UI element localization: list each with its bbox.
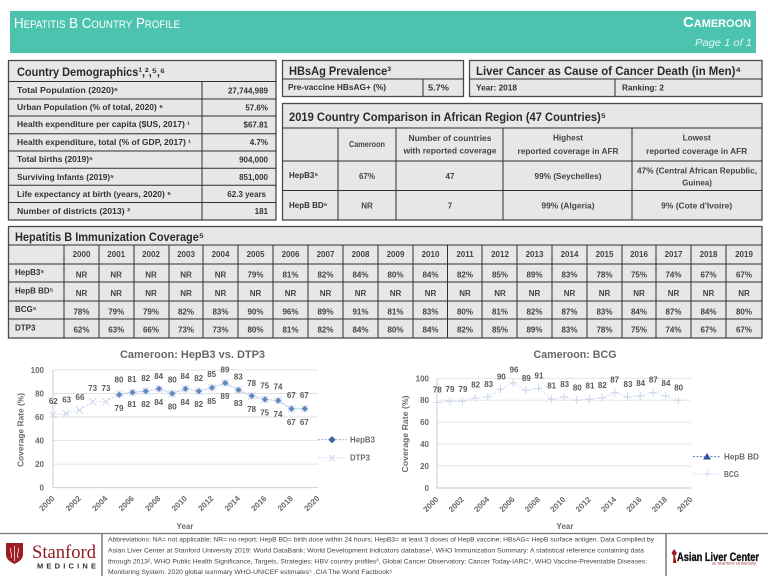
row: HepB3 coverage: 85%: [492, 270, 508, 280]
row: BCG coverage: 79%: [108, 308, 124, 316]
comparison row: HepB BD: 99% (Algeria): [542, 202, 595, 210]
x axis: [37, 494, 322, 513]
row: HepB3 coverage: 83%: [561, 270, 578, 280]
demographic rows: Health expenditure per capita ($US, 2017) ¹: [17, 120, 190, 129]
y axis title: Coverage Rate (%): [16, 393, 26, 467]
y axis: 100: [416, 374, 430, 383]
x axis title: Year: [557, 522, 573, 531]
comparison row: HepB3: Guinea): [682, 178, 712, 188]
BCG data labels: 78: [433, 386, 442, 394]
year header row: 2019: [735, 250, 753, 259]
row: HepB BD coverage: NR: [145, 289, 157, 298]
x axis: [421, 495, 695, 514]
row: DTP3 coverage: 82%: [317, 326, 334, 334]
row: HepB BD coverage: NR: [459, 289, 471, 298]
row: HepB BD coverage: [15, 286, 750, 298]
row: DTP3 coverage: DTP3: [15, 324, 36, 332]
row: HepB3 coverage: 75%: [631, 270, 647, 280]
comparison row: HepB3: 99% (Seychelles): [534, 172, 602, 181]
y axis: 80: [35, 390, 45, 398]
row: DTP3 coverage: 85%: [492, 326, 508, 334]
demographic rows: 62.3 years: [227, 190, 267, 199]
row: DTP3 coverage: 89%: [526, 326, 543, 334]
x axis: 2004: [472, 495, 492, 514]
row: DTP3 coverage: 63%: [108, 326, 124, 334]
y axis title: Coverage Rate (%): [401, 395, 410, 472]
row: HepB3 coverage: NR: [76, 270, 87, 280]
y axis: 60: [420, 418, 430, 427]
year header row: 2010: [422, 250, 440, 259]
x axis: 2020: [675, 495, 695, 514]
DTP3 data labels: 67: [300, 391, 309, 400]
legend: [318, 436, 376, 462]
BCG data labels: 89: [522, 374, 531, 383]
heading: HBsAg prevalence: HBsAg Prevalence³: [289, 64, 391, 78]
y axis: 60: [35, 413, 45, 422]
row: DTP3 coverage: 73%: [212, 326, 229, 334]
HepB3 data labels: 89: [221, 392, 230, 401]
y axis: 40: [420, 440, 430, 449]
panel: immunization coverage table: [8, 226, 762, 338]
country name: Cameroon: [683, 14, 751, 31]
row: HepB BD coverage: NR: [180, 289, 192, 298]
demographic rows: 27,744,989: [228, 86, 269, 96]
row: BCG coverage: 84%: [700, 308, 717, 316]
x axis: 2016: [249, 494, 269, 513]
x axis: 2010: [170, 494, 189, 513]
year header row: 2006: [282, 250, 300, 259]
BCG data labels: 87: [610, 376, 620, 384]
year header row: 2000: [73, 250, 91, 259]
HepB3 data labels: 81: [128, 400, 137, 409]
BCG data labels: 91: [535, 372, 544, 380]
HepB3 data labels: 80: [168, 402, 177, 412]
row: HepB BD coverage: NR: [110, 289, 122, 298]
row: BCG coverage: BCG⁵: [15, 305, 37, 314]
Medicine wordmark: MEDICINE: [37, 562, 96, 570]
DTP3 data labels: 84: [181, 372, 190, 381]
demographic rows: 904,000: [239, 156, 269, 164]
DTP3 data labels: 82: [194, 374, 204, 383]
Stanford University tagline: at Stanford University: [712, 560, 756, 566]
row: HepB3 coverage: 89%: [526, 270, 543, 280]
year header row: 2016: [630, 250, 648, 259]
comparison column headers: Lowest: [683, 134, 711, 142]
row: BCG coverage: [15, 305, 752, 316]
BCG data labels: 80: [674, 384, 684, 392]
row: HepB BD coverage: NR: [668, 289, 679, 298]
year header row: 2018: [700, 250, 718, 259]
year header row: 2004: [212, 250, 230, 259]
demographic rows: Number of districts (2013) ²: [17, 207, 130, 216]
line chart: BCG: [401, 349, 759, 531]
x axis: 2010: [548, 495, 568, 514]
BCG data labels: 82: [598, 381, 607, 390]
BCG data labels: 84: [636, 379, 646, 388]
row: BCG coverage: 78%: [73, 308, 90, 316]
row: BCG coverage: 83%: [596, 308, 613, 316]
row: HepB BD coverage: NR: [703, 289, 714, 298]
x axis: 2016: [625, 495, 644, 514]
y axis: 40: [35, 437, 45, 446]
x axis title: Year: [177, 522, 193, 531]
DTP3 series: [53, 383, 305, 415]
chart title: Cameroon: BCG: [534, 349, 616, 361]
demographic rows: 851,000: [239, 173, 269, 182]
row: DTP3 coverage: 80%: [247, 326, 264, 334]
row: HepB BD coverage: NR: [529, 289, 540, 298]
comparison row: HepB3: 47% (Central African Republic,: [637, 166, 757, 176]
HepB3 data labels: 85: [207, 397, 217, 406]
demographic rows: Total Population (2020)⁶: [17, 86, 118, 95]
comparison row: HepB3: [289, 166, 757, 188]
abbreviations and sources: [108, 536, 655, 576]
icon: red figure: [672, 549, 677, 563]
DTP3 data labels: 67: [287, 391, 296, 400]
row: BCG coverage: 81%: [387, 308, 404, 316]
pre-vaccine value: 5.7%: [428, 84, 449, 92]
demographic rows: Surviving Infants (2019)⁵: [17, 173, 114, 182]
HepB3 data labels: [115, 392, 309, 427]
BCG data labels: 80: [573, 384, 582, 392]
row: BCG coverage: 83%: [422, 308, 439, 316]
row: HepB3 coverage: 84%: [352, 270, 369, 280]
row: BCG coverage: 84%: [631, 308, 647, 316]
comparison column headers: Cameroon: [349, 140, 385, 149]
row: HepB3 coverage: 82%: [457, 270, 473, 280]
row: BCG coverage: 83%: [212, 308, 229, 316]
x axis: 2006: [117, 494, 136, 513]
x axis: 2008: [143, 494, 163, 513]
row: BCG coverage: 87%: [561, 308, 578, 316]
row: HepB3 coverage: HepB3⁵: [15, 268, 44, 277]
comparison row: HepB3: 47: [446, 172, 455, 181]
row: BCG coverage: 91%: [352, 308, 369, 316]
line chart: HepB3 vs DTP3: [16, 349, 376, 531]
row: HepB3 coverage: [15, 268, 752, 280]
row: BCG coverage: 82%: [178, 308, 194, 316]
DTP3 data labels: 80: [168, 376, 177, 384]
chart title: Cameroon: HepB3 vs. DTP3: [120, 349, 265, 361]
abbreviations and sources: Abbreviations: NA= not applicable; NR= no report; HepB BD= birth dose within 24 hours; HepB3= at least 3 doses of HepB vaccine; HBsAG= HepB surface antigen. Data Compiled by: [108, 536, 655, 544]
row: HepB3 coverage: NR: [215, 270, 226, 280]
BCG data labels: 87: [649, 376, 658, 384]
year header row: 2015: [596, 250, 614, 259]
row: HepB BD coverage: NR: [390, 289, 401, 298]
y axis: 80: [420, 396, 430, 405]
abbreviations and sources: Monitoring System. 2020 global summary WHO-UNICEF estimates⁵ ,CIA The World Factbook⁶: [108, 569, 392, 576]
year header row: 2014: [561, 250, 579, 259]
legend: HepB BD: [724, 452, 759, 462]
year header row: 2002: [142, 250, 160, 259]
demographic rows: 4.7%: [250, 138, 268, 147]
row: HepB BD coverage: NR: [320, 289, 331, 298]
DTP3 data labels: 73: [88, 384, 98, 393]
HepB3 series: [119, 383, 305, 409]
BCG data labels: 83: [624, 380, 633, 389]
row: HepB3 coverage: 74%: [665, 270, 682, 280]
year header row: 2017: [665, 250, 683, 259]
abbreviations and sources: through 2013², WHO Public Health Significance, Targets, Strategies: HBV country profiles³, Global Cancer Observatory: Cancer Today-IARC⁴, WHO Vaccine-Preventable Diseases:: [108, 558, 647, 566]
DTP3 data labels: 78: [247, 379, 257, 388]
year header row: 2011: [456, 250, 474, 259]
DTP3 data labels: 83: [234, 372, 243, 382]
comparison column headers: reported coverage in AFR: [646, 147, 747, 156]
year header row: 2009: [387, 250, 405, 259]
demographic rows: 181: [255, 207, 269, 216]
row: BCG coverage: 80%: [736, 308, 752, 316]
row: HepB3 coverage: 82%: [317, 270, 334, 280]
row: HepB BD coverage: NR: [285, 289, 296, 298]
footer: [0, 534, 768, 576]
row: HepB BD coverage: NR: [355, 289, 366, 298]
row: HepB BD coverage: NR: [494, 289, 506, 298]
DTP3 data labels: 73: [102, 384, 111, 393]
row: DTP3 coverage: 75%: [631, 326, 647, 334]
BCG data labels: 79: [459, 385, 468, 394]
comparison row: HepB BD: NR: [361, 202, 373, 210]
heading: country comparison: 2019 Country Comparison in African Region (47 Countries)⁵: [289, 110, 606, 124]
page number: Page 1 of 1: [695, 37, 752, 49]
HepB3 data labels: 74: [274, 410, 283, 419]
row: DTP3 coverage: 83%: [561, 326, 578, 334]
row: HepB BD coverage: NR: [425, 289, 436, 298]
x axis: 2012: [196, 494, 216, 513]
DTP3 data labels: 89: [221, 366, 230, 374]
BCG data labels: 81: [586, 382, 595, 390]
row: HepB BD coverage: NR: [633, 289, 645, 298]
year header row: [73, 250, 753, 259]
pre-vaccine label: Pre-vaccine HBsAG+ (%): [288, 83, 386, 92]
x axis: 2006: [498, 495, 517, 514]
row: BCG coverage: 89%: [317, 308, 334, 316]
DTP3 data labels: 63: [62, 396, 72, 404]
comparison row: HepB3: 67%: [359, 172, 375, 181]
HepB3 data labels: 84: [154, 398, 164, 407]
DTP3 data labels: 85: [207, 370, 217, 379]
DTP3 data labels: 81: [128, 375, 137, 384]
x axis: 2000: [37, 494, 57, 513]
row: HepB BD coverage: HepB BD⁵: [15, 286, 54, 296]
BCG data labels: [433, 366, 684, 394]
BCG data labels: 96: [510, 366, 519, 374]
demographic rows: Health expenditure, total (% of GDP, 2017) ¹: [17, 138, 191, 147]
row: HepB3 coverage: NR: [145, 270, 157, 280]
BCG series: [437, 383, 678, 402]
comparison row: HepB BD: 7: [448, 202, 453, 210]
DTP3 data labels: 84: [154, 372, 164, 381]
heading: immunization coverage: Hepatitis B Immunization Coverage⁵: [15, 230, 204, 244]
BCG data labels: 79: [446, 385, 455, 394]
legend: HepB3: [350, 436, 376, 444]
row: HepB3 coverage: 84%: [422, 270, 439, 280]
demographic rows: [17, 86, 269, 216]
row: HepB3 coverage: 78%: [596, 270, 613, 280]
row: BCG coverage: 82%: [526, 308, 543, 316]
row: DTP3 coverage: 67%: [736, 326, 752, 334]
BCG data labels: 83: [560, 380, 570, 389]
BCG data labels: 83: [484, 380, 494, 389]
row: DTP3 coverage: 84%: [352, 326, 369, 334]
year header row: 2013: [526, 250, 544, 259]
demographic rows: 57.6%: [245, 104, 268, 112]
row: BCG coverage: 90%: [247, 308, 264, 316]
x axis: 2002: [64, 494, 83, 513]
row: BCG coverage: 79%: [143, 308, 159, 316]
x axis: 2004: [90, 494, 110, 513]
row: DTP3 coverage: [15, 324, 752, 334]
year header row: 2003: [177, 250, 195, 259]
x axis: 2020: [302, 494, 322, 513]
DTP3 data labels: 80: [115, 376, 124, 384]
header banner: [10, 11, 756, 53]
y axis: 20: [35, 460, 45, 469]
row: HepB3 coverage: 79%: [247, 270, 264, 280]
legend: DTP3: [350, 454, 371, 462]
icon: Stanford shield: [6, 543, 23, 564]
DTP3 data labels: 74: [274, 382, 283, 392]
Asian Liver Center logo: [672, 549, 759, 566]
x axis: 2014: [223, 494, 242, 513]
row: DTP3 coverage: 67%: [700, 326, 717, 334]
y axis: 20: [420, 462, 430, 471]
row: BCG coverage: 96%: [282, 308, 299, 316]
y axis: [416, 374, 430, 493]
year header row: 2001: [107, 250, 126, 259]
y axis: 0: [425, 484, 430, 493]
cancer year: Year: 2018: [476, 84, 518, 92]
row: HepB BD coverage: NR: [599, 289, 610, 298]
row: HepB3 coverage: 67%: [700, 270, 717, 280]
comparison column headers: reported coverage in AFR: [518, 147, 619, 156]
row: HepB3 coverage: 67%: [736, 270, 752, 280]
HepB3 data labels: 84: [181, 398, 190, 407]
HepB3 data labels: 67: [300, 418, 309, 427]
Stanford Medicine logo: [6, 542, 96, 570]
row: HepB BD coverage: NR: [564, 289, 575, 298]
row: HepB3 coverage: NR: [180, 270, 192, 280]
abbreviations and sources: Asian Liver Center at Stanford University 2019: World DataBank: World Development Indicators database¹, WHO Immunization Summary: A statistical reference containing data: [108, 548, 644, 554]
row: DTP3 coverage: 73%: [178, 326, 194, 334]
y axis: 100: [31, 366, 45, 375]
comparison row: HepB3: HepB3⁵: [289, 171, 318, 180]
BCG data labels: 81: [547, 382, 557, 390]
HepB3 data labels: 75: [260, 408, 270, 418]
HepB3 data labels: 82: [141, 400, 151, 409]
row: BCG coverage: 80%: [457, 308, 473, 316]
x axis: 2002: [447, 495, 466, 514]
row: BCG coverage: 81%: [492, 308, 508, 316]
y axis: [31, 366, 45, 493]
comparison column headers: with reported coverage: [402, 146, 497, 156]
demographic rows: $67.81: [244, 120, 269, 130]
row: DTP3 coverage: 80%: [387, 326, 404, 334]
comparison column headers: [349, 134, 747, 156]
x axis: 2000: [421, 495, 441, 514]
heading: country demographics: Country Demographics¹,²,⁵,⁶: [17, 65, 165, 79]
DTP3 data labels: 75: [260, 382, 270, 390]
row: DTP3 coverage: 74%: [665, 326, 682, 334]
comparison column headers: Number of countries: [408, 134, 492, 143]
x axis: 2014: [599, 495, 619, 514]
report title: Hepatitis B Country Profile: [14, 15, 180, 32]
comparison row: HepB BD: HepB BD⁵: [289, 201, 328, 210]
legend: [693, 452, 759, 479]
year header row: 2007: [317, 250, 335, 259]
cancer ranking: Ranking: 2: [622, 84, 665, 92]
HepB3 data labels: 83: [234, 399, 243, 408]
row: DTP3 coverage: 84%: [422, 326, 439, 334]
x axis: 2018: [650, 495, 669, 514]
y axis: 0: [40, 484, 45, 493]
legend: BCG: [724, 470, 739, 479]
year header row: 2012: [491, 250, 509, 259]
row: HepB BD coverage: NR: [250, 289, 261, 298]
x axis: 2012: [574, 495, 593, 514]
year header row: 2008: [352, 250, 370, 259]
row: DTP3 coverage: 78%: [596, 326, 613, 334]
row: HepB BD coverage: NR: [215, 289, 226, 298]
DTP3 data labels: 62: [49, 397, 58, 406]
panel: liver cancer: [470, 60, 762, 96]
x axis: 2008: [523, 495, 542, 514]
HepB3 data labels: 67: [287, 418, 296, 427]
row: HepB BD coverage: NR: [738, 289, 750, 298]
panel: country comparison table: [282, 104, 762, 220]
DTP3 data labels: 82: [141, 374, 151, 383]
HepB3 data labels: 78: [247, 405, 257, 414]
row: HepB3 coverage: 80%: [387, 270, 404, 280]
BCG data labels: 84: [662, 379, 671, 388]
BCG data labels: 82: [471, 380, 481, 390]
HepB3 data labels: 79: [115, 404, 124, 413]
Stanford wordmark: Stanford: [32, 542, 96, 563]
panel: country demographics: [8, 60, 276, 220]
DTP3 data labels: 66: [76, 393, 85, 402]
row: DTP3 coverage: 66%: [143, 326, 159, 334]
demographic rows: Total births (2019)⁵: [17, 155, 93, 164]
comparison column headers: Highest: [553, 134, 583, 142]
row: DTP3 coverage: 82%: [457, 326, 473, 334]
heading: liver cancer: Liver Cancer as Cause of Cancer Death (in Men)⁴: [476, 64, 741, 78]
row: HepB BD coverage: NR: [76, 289, 87, 298]
demographic rows: Urban Population (% of total, 2020) ⁶: [17, 103, 163, 112]
DTP3 data labels: [49, 366, 309, 406]
row: BCG coverage: 87%: [665, 308, 682, 316]
demographic rows: Life expectancy at birth (years, 2020) ⁶: [17, 190, 171, 199]
panel: HBsAg prevalence: [282, 60, 464, 96]
comparison row: HepB BD: 9% (Cote d'Ivoire): [661, 202, 733, 210]
x axis: 2018: [276, 494, 295, 513]
row: DTP3 coverage: 81%: [282, 326, 299, 334]
row: DTP3 coverage: 62%: [73, 326, 90, 334]
row: HepB3 coverage: 81%: [282, 270, 299, 280]
row: HepB3 coverage: NR: [110, 270, 122, 280]
comparison row: HepB BD: [289, 201, 733, 210]
HepB3 data labels: 82: [194, 400, 204, 409]
BCG data labels: 90: [497, 372, 506, 382]
year header row: 2005: [247, 250, 265, 259]
